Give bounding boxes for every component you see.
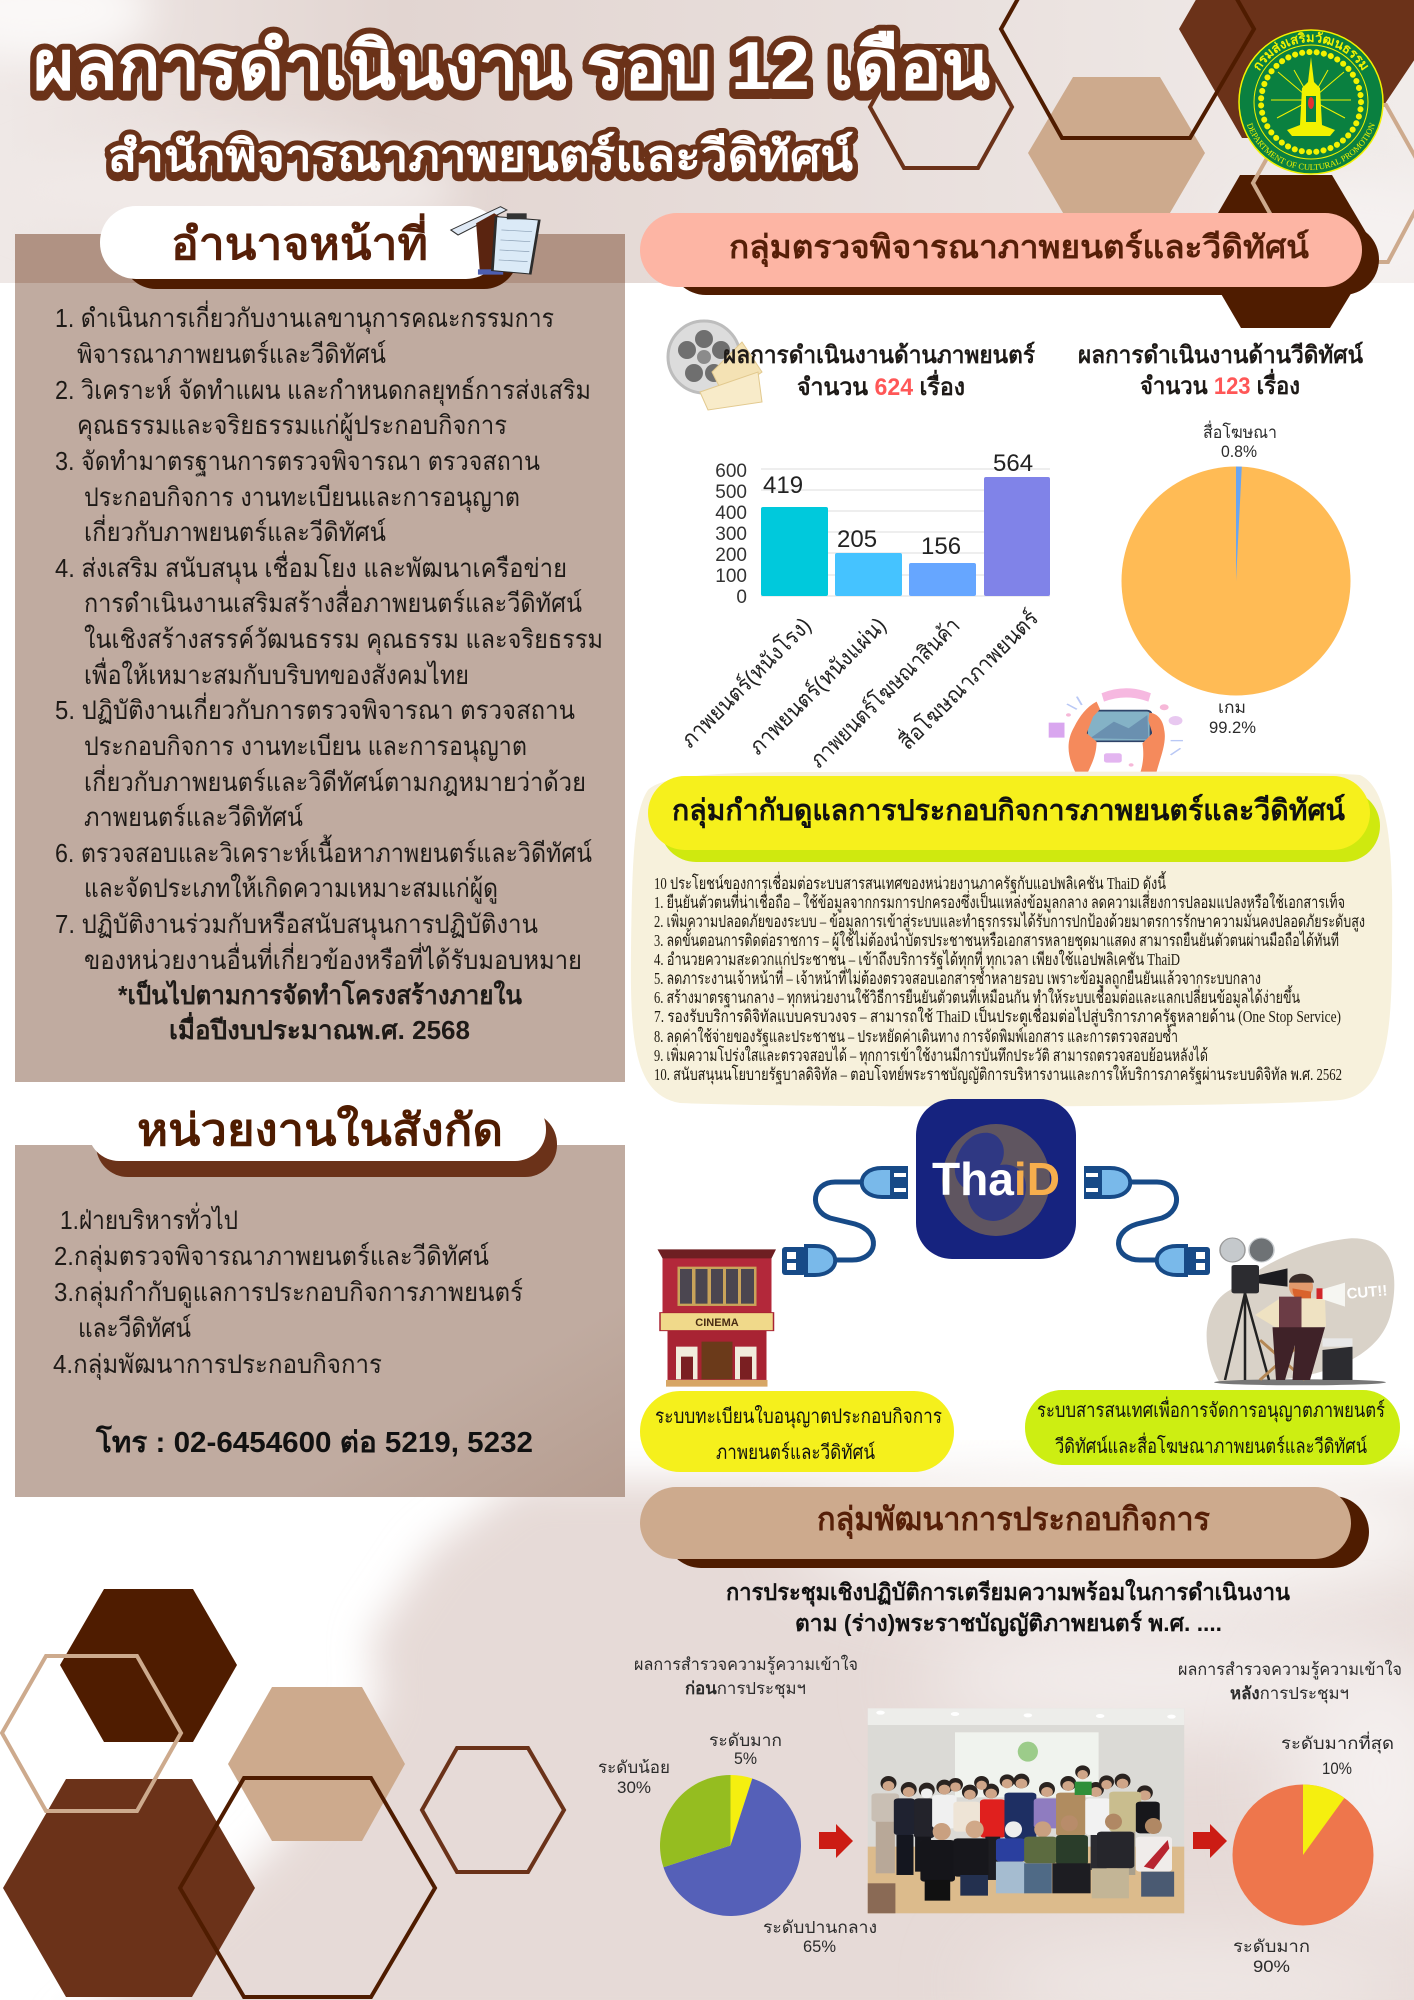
bar chart: film counts: ภาพยนตร์(หนังแผ่น)	[744, 612, 891, 760]
logo: Department of Cultural Promotion seal	[1238, 29, 1384, 175]
heading: film results	[723, 341, 1035, 401]
duties list: 6. ตรวจสอบและวิเคราะห์เนื้อหาภาพยนตร์และวิดีทัศน์	[55, 834, 592, 868]
logo: Department of Cultural Promotion seal: กรมส่งเสริมวัฒนธรรม	[1254, 32, 1368, 71]
bar chart: film counts: ภาพยนตร์โฆษณาสินค้า	[805, 613, 965, 773]
duties list: ในเชิงสร้างสรรค์วัฒนธรรม คุณธรรม และจริยธรรม	[84, 624, 603, 655]
duties list: *เป็นไปตามการจัดทำโครงสร้างภายใน	[118, 979, 522, 1010]
heading pill: licensing supervision group: กลุ่มกำกับดูแลการประกอบกิจการภาพยนตร์และวีดิทัศน์	[672, 793, 1345, 828]
pie chart: knowledge after meeting: 90%	[1253, 1957, 1290, 1976]
pie chart: knowledge after meeting: ระดับมากที่สุด	[1281, 1731, 1394, 1754]
bar chart: film counts: 600	[715, 461, 747, 482]
panel: affiliated units	[15, 1098, 625, 1497]
duties list: เกี่ยวกับภาพยนตร์และวีดิทัศน์	[84, 514, 386, 547]
benefits text: 8. ลดค่าใช้จ่ายของรัฐและประชาชน – ประหยัดค่าเดินทาง การจัดพิมพ์เอกสาร และการตรวจสอบซ้ำ	[654, 1024, 1178, 1047]
duties list: พิจารณาภาพยนตร์และวีดิทัศน์	[77, 339, 386, 369]
pie chart: knowledge before meeting: ก่อนการประชุมฯ	[685, 1679, 806, 1699]
heading: film results: ผลการดำเนินงานด้านภาพยนตร์	[723, 341, 1035, 369]
bar chart: film counts: 200	[715, 545, 747, 566]
pie chart: knowledge after meeting: 10%	[1322, 1759, 1352, 1778]
callout: business registration system: ระบบทะเบียนใบอนุญาตประกอบกิจการ	[655, 1405, 942, 1429]
heading pill: business development group: กลุ่มพัฒนาการประกอบกิจการ	[817, 1501, 1210, 1540]
duties list	[55, 300, 603, 1045]
duties list: 3. จัดทำมาตรฐานการตรวจพิจารณา ตรวจสถาน	[55, 446, 540, 477]
duties list: เพื่อให้เหมาะสมกับบริบทของสังคมไทย	[84, 657, 469, 690]
icon: hands holding game phone	[1049, 688, 1183, 775]
heading: film results: จำนวน 624 เรื่อง	[797, 369, 965, 401]
units list: 4.กลุ่มพัฒนาการประกอบกิจการ	[53, 1349, 382, 1380]
units list: 1.ฝ่ายบริหารทั่วไป	[60, 1202, 238, 1235]
benefits text: 4. อำนวยความสะดวกแก่ประชาชน – เข้าถึงบริการรัฐได้ทุกที่ ทุกเวลา เพียงใช้แอปพลิเคชัน ThaiD	[654, 947, 1180, 970]
heading: workshop title: การประชุมเชิงปฏิบัติการเตรียมความพร้อมในการดำเนินงาน	[726, 1578, 1290, 1607]
icon: film director: CUT!!	[1346, 1282, 1388, 1303]
callout: licensing information system	[1025, 1390, 1400, 1465]
pie chart: video share: สื่อโฆษณา	[1203, 420, 1277, 442]
duties list: การดำเนินงานเสริมสร้างสื่อภาพยนตร์และวีดิทัศน์	[84, 585, 582, 618]
units list	[53, 1202, 523, 1380]
icon: left cable and plugs	[782, 1168, 906, 1275]
heading: video results: จำนวน 123 เรื่อง	[1140, 368, 1300, 400]
benefits text: 10 ประโยชน์ของการเชื่อมต่อระบบสารสนเทศของหน่วยงานภาครัฐกับแอปพลิเคชัน ThaiD ดังนี้	[654, 871, 1166, 894]
duties list: 7. ปฏิบัติงานร่วมกับหรือสนับสนุนการปฏิบัติงาน	[55, 909, 538, 940]
subtitle: สำนักพิจารณาภาพยนตร์และวีดิทัศน์	[108, 131, 854, 181]
title: ผลการดำเนินงาน รอบ 12 เดือน	[33, 28, 990, 104]
panel: cream benefits block	[631, 772, 1392, 1106]
bar chart: film counts: ภาพยนตร์(หนังโรง)	[676, 613, 816, 753]
heading: workshop title: ตาม (ร่าง)พระราชบัญญัติภาพยนตร์ พ.ศ. ....	[795, 1610, 1222, 1637]
heading: video results	[1078, 341, 1364, 400]
pie chart: knowledge before meeting: 5%	[734, 1749, 757, 1768]
duties list: ประกอบกิจการ งานทะเบียนและการอนุญาต	[84, 482, 520, 513]
arrow: before to photo	[819, 1824, 853, 1858]
heading pill: duties	[100, 206, 518, 289]
decorative hexagons: top right	[870, 0, 1414, 328]
bar chart: film counts: 0	[736, 587, 747, 608]
duties list: เกี่ยวกับภาพยนตร์และวิดีทัศน์ตามกฎหมายว่าด้วย	[84, 764, 586, 797]
pie chart: knowledge before meeting	[598, 1654, 877, 1956]
pie chart: knowledge before meeting: ระดับน้อย	[598, 1758, 670, 1777]
panel: duties	[15, 206, 625, 1082]
duties list: และจัดประเภทให้เกิดความเหมาะสมแก่ผู้ดู	[84, 873, 498, 904]
icon: right cable and plugs	[1086, 1168, 1210, 1275]
bar chart: film counts: 300	[715, 524, 747, 545]
units list: 2.กลุ่มตรวจพิจารณาภาพยนตร์และวีดิทัศน์	[54, 1241, 489, 1272]
benefits text: 9. เพิ่มความโปร่งใสและตรวจสอบได้ – ทุกการเข้าใช้งานมีการบันทึกประวัติ สามารถตรวจสอบย้อนหลังได้	[654, 1043, 1208, 1066]
duties list: 1. ดำเนินการเกี่ยวกับงานเลขานุการคณะกรรมการ	[55, 300, 554, 334]
duties list: คุณธรรมและจริยธรรมแก่ผู้ประกอบกิจการ	[77, 410, 507, 441]
duties list: ของหน่วยงานอื่นที่เกี่ยวข้องหรือที่ได้รับมอบหมาย	[84, 942, 582, 975]
icon: cinema building: CINEMA	[695, 1317, 739, 1329]
duties list: 5. ปฏิบัติงานเกี่ยวกับการตรวจพิจารณา ตรวจสถาน	[55, 692, 575, 725]
icon: cinema building	[658, 1249, 776, 1387]
bar chart: film counts	[676, 450, 1050, 773]
duties list: ประกอบกิจการ งานทะเบียน และการอนุญาต	[84, 731, 527, 762]
bar chart: film counts: 419	[763, 472, 803, 499]
pie chart: knowledge after meeting: ผลการสำรวจความรู้ความเข้าใจ	[1178, 1659, 1402, 1680]
pie chart: video share: 99.2%	[1209, 718, 1256, 737]
heading pill: licensing supervision group	[648, 776, 1380, 862]
heading pill: affiliated units	[88, 1098, 557, 1177]
callout: business registration system: ภาพยนตร์และวีดิทัศน์	[716, 1441, 875, 1464]
heading: workshop title	[726, 1578, 1290, 1637]
pie chart: video share: 0.8%	[1221, 442, 1257, 461]
icon: person with clipboard	[451, 207, 539, 275]
phone number: โทร : 02-6454600 ต่อ 5219, 5232	[95, 1424, 533, 1459]
bar chart: film counts: 205	[837, 526, 877, 553]
pie chart: knowledge before meeting: 65%	[803, 1937, 836, 1956]
duties list: 2. วิเคราะห์ จัดทำแผน และกำหนดกลยุทธ์การส่งเสริม	[55, 375, 591, 406]
duties list: เมื่อปีงบประมาณพ.ศ. 2568	[169, 1011, 470, 1045]
benefits text	[654, 871, 1365, 1085]
arrow: photo to after	[1193, 1824, 1227, 1858]
bar chart: film counts: สื่อโฆษณาภาพยนตร์	[892, 603, 1043, 755]
pie chart: knowledge before meeting: 30%	[617, 1778, 651, 1797]
icon: ThaiD app	[916, 1099, 1076, 1259]
heading pill: duties: อำนาจหน้าที่	[171, 213, 428, 269]
logo: Department of Cultural Promotion seal: DEPARTMENT OF CULTURAL PROMOTION	[1246, 122, 1375, 170]
pie chart: knowledge before meeting: ระดับปานกลาง	[763, 1918, 877, 1937]
icon: film director	[1207, 1238, 1394, 1385]
photo: workshop group	[868, 1708, 1184, 1913]
pie chart: knowledge before meeting: ผลการสำรวจความรู้ความเข้าใจ	[634, 1654, 858, 1675]
heading pill: affiliated units: หน่วยงานในสังกัด	[137, 1104, 503, 1155]
bar chart: film counts: 500	[715, 482, 747, 503]
pie chart: knowledge after meeting: ระดับมาก	[1233, 1937, 1310, 1956]
units list: และวีดิทัศน์	[78, 1313, 191, 1343]
heading: video results: ผลการดำเนินงานด้านวีดิทัศน์	[1078, 341, 1364, 369]
duties list: 4. ส่งเสริม สนับสนุน เชื่อมโยง และพัฒนาเครือข่าย	[55, 550, 567, 584]
callout: business registration system	[640, 1391, 954, 1472]
pie chart: knowledge after meeting	[1178, 1659, 1402, 1976]
heading pill: film and video review group: กลุ่มตรวจพิจารณาภาพยนตร์และวีดิทัศน์	[729, 229, 1309, 268]
bar chart: film counts: 156	[921, 533, 961, 560]
decorative hexagons: bottom left	[2, 1589, 564, 1997]
bar chart: film counts: 564	[993, 450, 1033, 477]
bar chart: film counts: 400	[715, 503, 747, 524]
pie chart: video share: เกม	[1218, 698, 1246, 717]
pie chart: knowledge before meeting: ระดับมาก	[709, 1731, 782, 1750]
units list: 3.กลุ่มกำกับดูแลการประกอบกิจการภาพยนตร์	[54, 1277, 523, 1308]
pie chart: knowledge after meeting: หลังการประชุมฯ	[1230, 1684, 1349, 1704]
pie chart: video share	[1122, 420, 1350, 737]
heading pill: film and video review group	[640, 213, 1379, 295]
duties list: ภาพยนตร์และวีดิทัศน์	[84, 802, 303, 832]
icon: film reel and tickets	[668, 321, 762, 410]
icon: ThaiD app: ThaiD	[932, 1153, 1060, 1205]
heading pill: business development group	[640, 1487, 1369, 1568]
bar chart: film counts: 100	[715, 566, 747, 587]
